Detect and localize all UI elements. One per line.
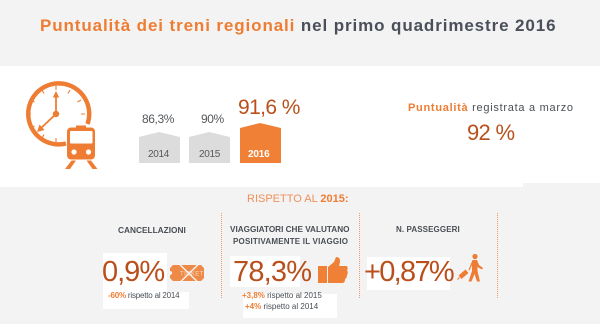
stat heading: CANCELLAZIONI <box>118 225 186 235</box>
title: Puntualità dei treni regionali nel primo quadrimestre 2016 <box>40 16 556 35</box>
stat value: 0,9% <box>102 256 164 288</box>
callout label: Puntualità registrata a marzo <box>408 102 574 114</box>
stat note line 1: +3,8% rispetto al 2015 <box>242 291 322 300</box>
divider left <box>221 213 222 298</box>
house shape 2015 <box>189 132 230 163</box>
section heading: RISPETTO AL 2015: <box>247 193 348 205</box>
icon: crossed-out ticket: TICKET <box>180 272 204 278</box>
stat: cancellazioni <box>102 225 204 309</box>
callout: march punctuality <box>408 102 574 145</box>
stat: passeggeri <box>364 225 483 290</box>
stat note line 2: +4% rispetto al 2014 <box>245 302 318 311</box>
bar: 2014 <box>139 112 180 163</box>
divider right <box>497 213 498 298</box>
title band <box>0 0 600 66</box>
house shape 2016 <box>240 123 281 163</box>
icon: clock and train <box>26 81 98 169</box>
stat heading: VIAGGIATORI CHE VALUTANO <box>230 225 349 234</box>
bar: 2015 <box>189 112 230 163</box>
stat heading: N. PASSEGGERI <box>396 225 460 234</box>
value 2014: 86,3% <box>142 112 174 126</box>
stat note: -60% rispetto al 2014 <box>108 291 179 300</box>
panel: punctuality white band <box>0 66 600 187</box>
icon: thumbs up <box>318 257 348 283</box>
bar: 2016 <box>238 96 300 163</box>
value 2015: 90% <box>201 112 224 126</box>
icon: crossed-out ticket <box>170 265 204 292</box>
stat heading second line: POSITIVAMENTE IL VIAGGIO <box>233 237 348 246</box>
label 2016: 2016 <box>248 149 269 160</box>
house shape 2014 <box>139 132 180 163</box>
value 2016: 91,6 % <box>238 96 300 119</box>
stat: viaggiatori <box>230 225 350 318</box>
stat value: +0,87% <box>364 256 453 288</box>
callout value: 92 % <box>467 120 514 145</box>
label 2014: 2014 <box>148 149 169 160</box>
stat value: 78,3% <box>233 256 311 288</box>
divider middle <box>359 213 360 298</box>
label 2015: 2015 <box>199 149 220 160</box>
icon: traveller with suitcase <box>457 254 483 282</box>
